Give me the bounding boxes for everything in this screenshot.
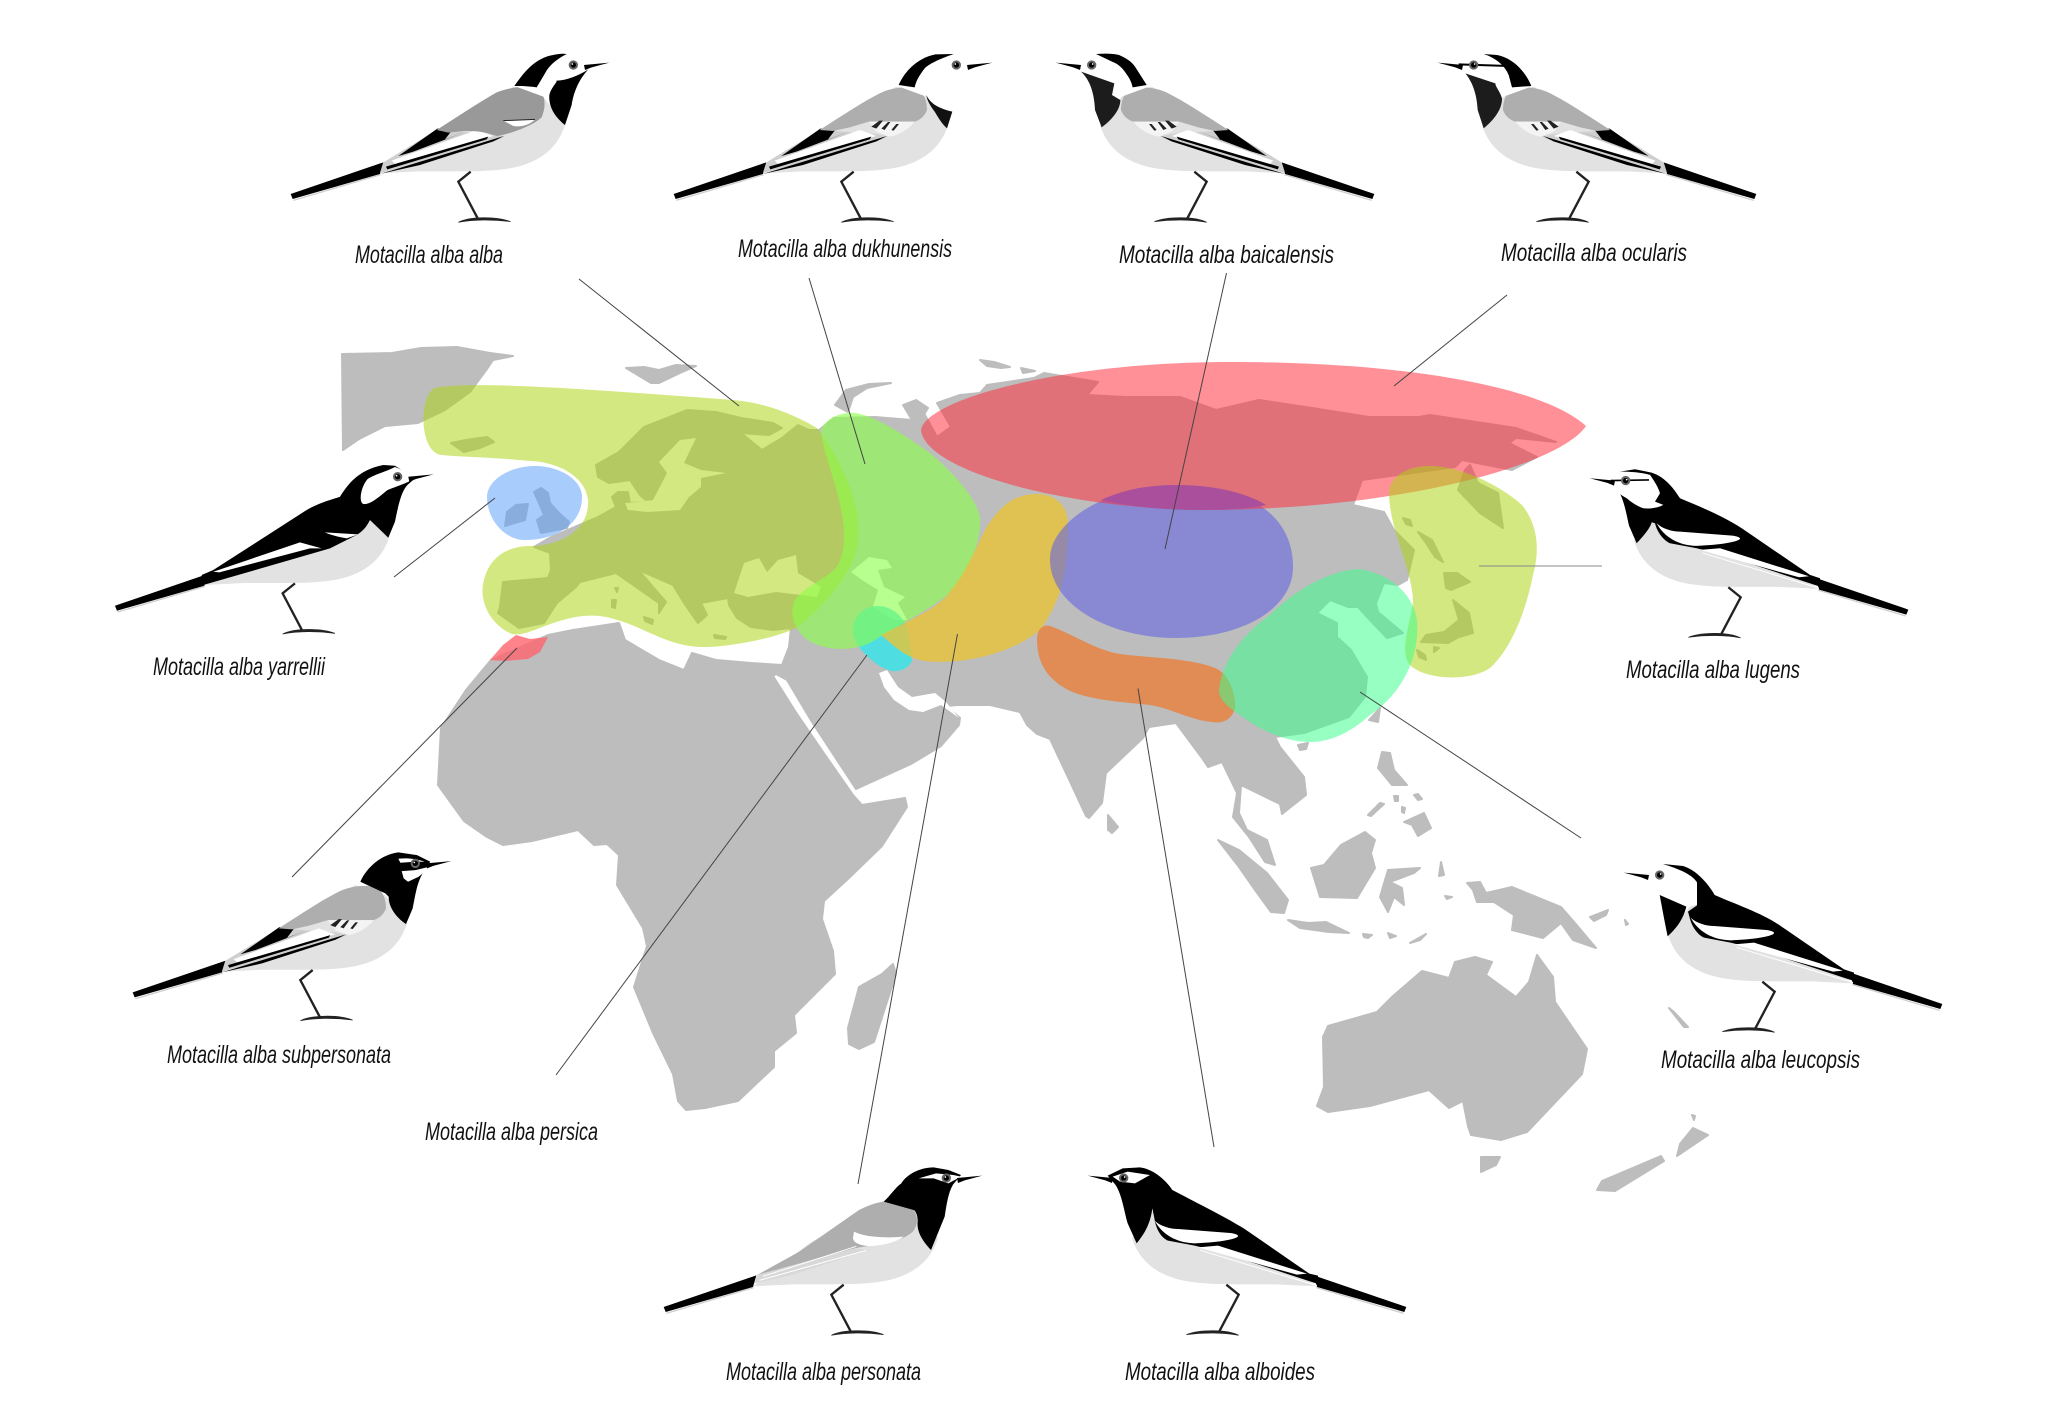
map: land masses xyxy=(342,347,1708,1191)
label: persica: Motacilla alba persica xyxy=(425,1118,598,1146)
label: yarrellii: Motacilla alba yarrellii xyxy=(153,653,326,681)
range: alba xyxy=(423,385,859,647)
bird: alboides xyxy=(1088,1167,1406,1335)
range overlap: baicalensis and ocularis xyxy=(1101,485,1266,510)
bird: baicalensis xyxy=(1056,54,1374,222)
range: subpersonata xyxy=(490,635,548,661)
label: lugens: Motacilla alba lugens xyxy=(1626,656,1800,684)
range: ocularis xyxy=(921,362,1586,510)
label: leucopsis: Motacilla alba leucopsis xyxy=(1661,1046,1860,1074)
bird: alba xyxy=(291,54,609,222)
range: baicalensis xyxy=(1050,485,1293,638)
bird: leucopsis xyxy=(1624,864,1942,1032)
label: dukhunensis: Motacilla alba dukhunensis xyxy=(738,235,952,263)
label: personata: Motacilla alba personata xyxy=(726,1358,921,1386)
label: alba: Motacilla alba alba xyxy=(355,241,503,269)
range: personata xyxy=(881,494,1068,662)
range: alboides xyxy=(1037,626,1235,722)
bird: dukhunensis xyxy=(674,54,992,222)
label: alboides: Motacilla alba alboides xyxy=(1125,1358,1315,1386)
label: ocularis: Motacilla alba ocularis xyxy=(1501,239,1687,267)
bird: lugens xyxy=(1590,469,1908,638)
range: leucopsis xyxy=(1219,569,1417,742)
range: lugens xyxy=(1389,466,1537,677)
range: yarrellii xyxy=(487,466,582,540)
map: inland seas xyxy=(625,438,959,718)
bird: subpersonata xyxy=(133,852,451,1021)
bird: ocularis xyxy=(1438,54,1756,222)
range: dukhunensis xyxy=(792,413,980,649)
bird: personata xyxy=(664,1167,982,1335)
label: subpersonata: Motacilla alba subpersonata xyxy=(167,1041,391,1069)
label: baicalensis: Motacilla alba baicalensis xyxy=(1119,241,1334,269)
leader lines xyxy=(292,273,1602,1184)
world map xyxy=(342,347,1708,1191)
range: persica xyxy=(853,606,912,671)
bird: yarrellii xyxy=(115,465,434,634)
